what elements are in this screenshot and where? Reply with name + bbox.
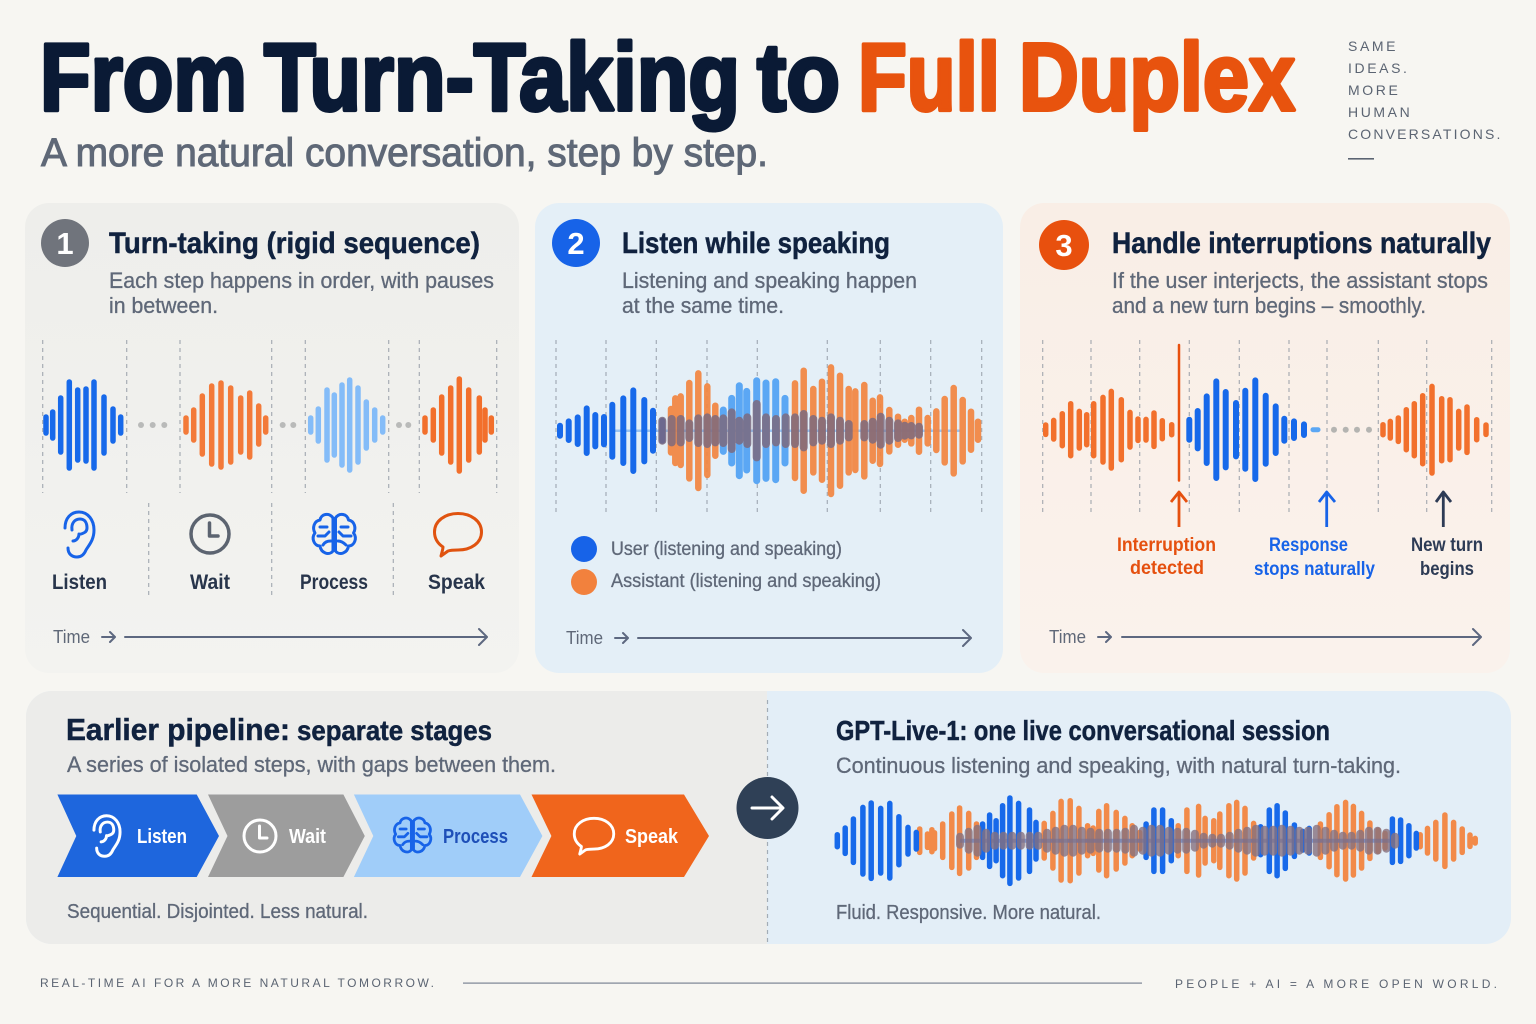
panel 2 description: [622, 268, 917, 318]
chevron: Process: Process: [443, 826, 508, 848]
GPT-Live-1 caption: Fluid. Responsive. More natural.: [836, 902, 1101, 924]
panel: turn-taking: [25, 203, 519, 673]
annotation: interruption detected: [1117, 492, 1216, 579]
annotation: interruption detected: Interruption: [1117, 535, 1216, 556]
side note: HUMAN: [1348, 104, 1412, 120]
panel 3 description: [1112, 268, 1488, 318]
annotation: response stops naturally: stops naturally: [1254, 559, 1375, 580]
panel 1 description: [109, 268, 494, 318]
title: [40, 24, 1295, 131]
icon: ear: [65, 512, 94, 557]
earlier pipeline heading: Earlier pipeline:: [66, 712, 290, 747]
time axis: [566, 628, 971, 648]
step badge 3: [1039, 220, 1089, 270]
footer: [40, 976, 1497, 991]
icon: brain: [313, 514, 355, 553]
label: Process: Process: [300, 571, 368, 594]
GPT-Live-1 description: Continuous listening and speaking, with natural turn-taking.: [836, 753, 1401, 778]
subtitle: A more natural conversation, step by step.: [41, 131, 768, 175]
earlier pipeline heading: separate stages: [297, 715, 492, 746]
panel 1 description: in between.: [109, 293, 218, 318]
chevron: Process: [354, 794, 542, 877]
earlier pipeline heading: [66, 712, 492, 747]
panel 1 description: Each step happens in order, with pauses: [109, 268, 494, 293]
chevron: Speak: Speak: [625, 826, 679, 848]
interruption waveform chart: [1043, 340, 1492, 515]
side note: SAME: [1348, 38, 1398, 54]
step badge 3: 3: [1055, 228, 1073, 263]
annotation: new turn begins: begins: [1420, 559, 1474, 580]
time axis: Time: [1049, 627, 1086, 647]
GPT-Live-1 heading: GPT-Live-1: one live conversational session: [836, 715, 1330, 746]
title: Duplex: [1019, 24, 1295, 131]
panel: pipeline comparison: [26, 691, 1511, 944]
title: Full: [858, 24, 1000, 131]
right half: GPT-Live-1: [836, 715, 1475, 924]
arrow badge: [736, 777, 798, 839]
side note: CONVERSATIONS.: [1348, 126, 1503, 142]
left half: earlier pipeline: [26, 691, 767, 944]
time axis: Time: [566, 628, 603, 648]
title: From: [40, 24, 247, 131]
label: Speak: Speak: [428, 571, 485, 594]
footer: PEOPLE + AI = A MORE OPEN WORLD.: [1175, 977, 1497, 991]
continuous waveform chart: [837, 798, 1475, 883]
step badge 2: [552, 219, 600, 267]
step badge 2: 2: [567, 226, 585, 261]
legend: [571, 536, 881, 595]
time axis: [1049, 627, 1481, 647]
annotation: new turn begins: [1411, 492, 1483, 580]
chevron: Speak: [532, 794, 709, 877]
chevron: Wait: Wait: [289, 826, 326, 848]
side note: IDEAS.: [1348, 60, 1410, 76]
legend: User (listening and speaking): [611, 539, 842, 560]
time axis: Time: [53, 627, 90, 647]
title: to: [757, 24, 840, 131]
panel 1 heading: Turn-taking (rigid sequence): [109, 227, 480, 260]
step badge 1: 1: [56, 226, 74, 261]
chevron: Listen: [57, 794, 219, 877]
icon: clock: [191, 515, 229, 553]
label: Listen: Listen: [52, 571, 107, 594]
panel 3 heading: Handle interruptions naturally: [1112, 227, 1491, 260]
chevron: Listen: Listen: [137, 826, 187, 848]
annotation: interruption detected: detected: [1130, 558, 1204, 579]
annotation: new turn begins: New turn: [1411, 535, 1483, 556]
panel: handle interruptions: [1020, 203, 1510, 673]
panel 2 description: Listening and speaking happen: [622, 268, 917, 293]
side note: MORE: [1348, 82, 1400, 98]
panel 2 description: at the same time.: [622, 293, 784, 318]
overlapping waveform chart: [556, 340, 982, 516]
panel: listen while speaking: [535, 203, 1003, 673]
legend: Assistant (listening and speaking): [611, 571, 881, 592]
annotation: response stops naturally: [1254, 492, 1375, 580]
icon: speech bubble: [434, 514, 482, 556]
step badge 1: [41, 219, 89, 267]
chevron: Wait: [208, 794, 365, 877]
panel 2 heading: Listen while speaking: [622, 227, 890, 260]
time axis: [53, 627, 487, 647]
title: Turn-Taking: [264, 24, 740, 131]
panel 3 description: If the user interjects, the assistant stops: [1112, 268, 1488, 293]
earlier pipeline description: A series of isolated steps, with gaps between them.: [67, 752, 556, 777]
sequential waveform chart: [43, 340, 497, 493]
label: Wait: Wait: [190, 571, 230, 594]
panel 3 description: and a new turn begins – smoothly.: [1112, 293, 1426, 318]
earlier pipeline caption: Sequential. Disjointed. Less natural.: [67, 901, 368, 923]
footer: REAL-TIME AI FOR A MORE NATURAL TOMORROW.: [40, 976, 434, 990]
side note: [1348, 38, 1503, 160]
annotation: response stops naturally: Response: [1269, 535, 1348, 556]
